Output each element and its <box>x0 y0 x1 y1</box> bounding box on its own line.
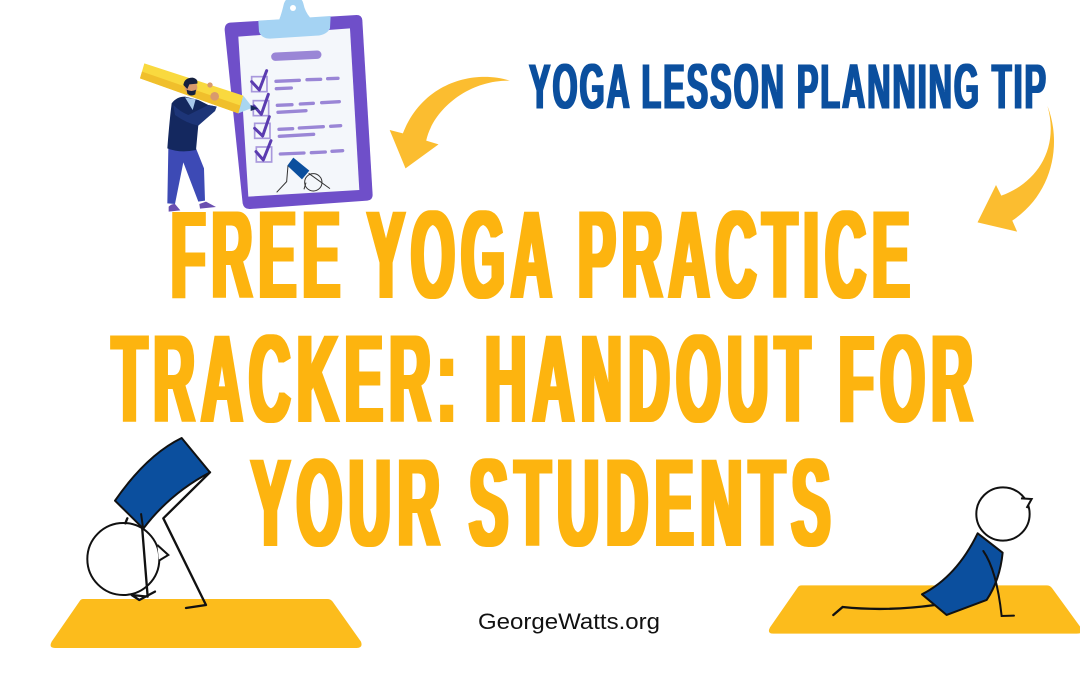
arrow: to title <box>978 106 1054 232</box>
list lines <box>275 55 343 154</box>
mini yoga figure <box>277 158 330 192</box>
man <box>167 78 219 212</box>
title <box>112 186 979 573</box>
torso <box>922 533 1003 615</box>
check marks <box>252 71 271 160</box>
pencil <box>140 63 258 113</box>
mat <box>51 599 362 648</box>
clipboard board <box>225 15 373 209</box>
leg <box>833 605 935 615</box>
arm <box>983 551 1014 616</box>
mat <box>769 585 1080 634</box>
trousers <box>167 148 205 204</box>
check boxes <box>252 77 272 162</box>
hands <box>210 92 219 101</box>
paper <box>238 28 359 197</box>
clipboard <box>225 0 373 209</box>
clip <box>258 0 331 39</box>
jacket <box>167 97 217 151</box>
man and pencil <box>140 63 258 212</box>
shirt <box>185 97 196 110</box>
illustration: cobra pose on yoga mat <box>769 487 1080 634</box>
head <box>976 487 1030 541</box>
torso <box>115 438 210 529</box>
illustration: forward fold on yoga mat <box>51 438 362 648</box>
website credit: GeorgeWatts.org <box>478 609 660 634</box>
head <box>87 523 159 595</box>
head <box>185 81 197 94</box>
icon: clipboard with man and pencil <box>140 0 373 212</box>
arrow: to clipboard <box>390 77 510 168</box>
legs and arms <box>125 472 210 608</box>
shoes <box>169 204 180 212</box>
